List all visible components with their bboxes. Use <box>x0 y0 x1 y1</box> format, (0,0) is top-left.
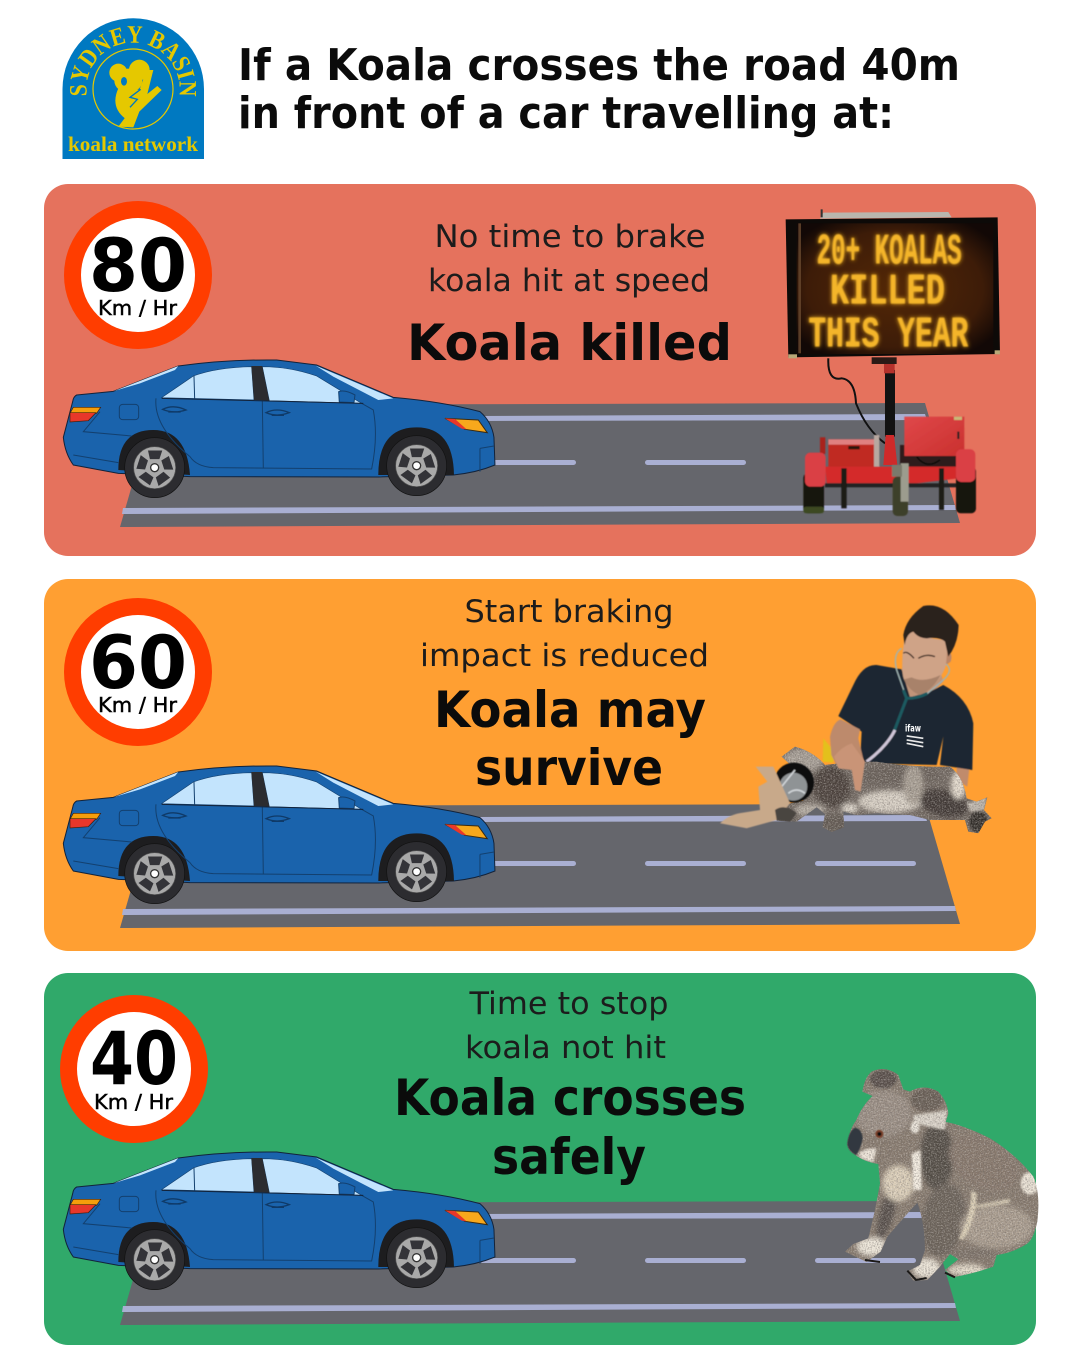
car <box>63 1152 495 1290</box>
injured koala with mask and bandage <box>776 746 992 834</box>
panel: 80 km/h <box>44 184 1036 556</box>
car <box>63 766 495 904</box>
panel: 60 km/h <box>44 579 1036 951</box>
speed sign: 80: Km / Hr <box>98 296 178 320</box>
variable message sign on trailer: KILLED <box>830 268 945 317</box>
title <box>238 40 960 139</box>
outcome: koala crosses safely: Koala crosses <box>394 1069 746 1127</box>
title: in front of a car travelling at: <box>238 88 894 139</box>
outcome: koala may survive <box>434 681 706 797</box>
text: time to stop: Time to stop <box>468 986 668 1022</box>
logo koala emblem <box>109 60 162 127</box>
speed sign: 80 <box>64 201 212 349</box>
speed sign: 60: 60 <box>89 621 187 706</box>
photo: koala sitting <box>845 1069 1038 1281</box>
car <box>63 360 495 498</box>
outcome: koala crosses safely: safely <box>492 1128 646 1186</box>
speed sign: 60: Km / Hr <box>98 693 178 717</box>
text: no time to brake: No time to brake <box>434 219 706 255</box>
title: If a Koala crosses the road 40m <box>238 40 960 91</box>
variable message sign on trailer: 20+ KOALAS <box>817 228 962 277</box>
logo: Sydney Basin koala network <box>62 18 204 159</box>
road <box>120 403 960 527</box>
photo: vet treating injured koala <box>720 605 997 837</box>
text: no time to brake: koala hit at speed <box>428 263 710 299</box>
road <box>120 804 960 928</box>
outcome: koala may survive: survive <box>475 739 663 797</box>
outcome: koala killed: Koala killed <box>407 314 732 372</box>
speed sign: 40: Km / Hr <box>94 1090 174 1114</box>
speed sign: 40: 40 <box>90 1017 178 1102</box>
panel: 40 km/h <box>44 973 1047 1345</box>
logo: Sydney Basin koala network: koala network <box>68 132 198 156</box>
speed sign: 80: 80 <box>89 224 187 309</box>
text: time to stop <box>465 986 668 1066</box>
photo: vet treating injured koala: ifaw <box>905 724 921 735</box>
text: start braking <box>420 594 709 674</box>
road <box>120 1201 960 1325</box>
text: no time to brake <box>428 219 710 299</box>
text: start braking: Start braking <box>464 594 674 630</box>
speed sign: 40 <box>60 995 208 1143</box>
outcome: koala crosses safely <box>394 1069 746 1186</box>
logo arc text: SYDNEY BASIN <box>70 26 196 96</box>
trailer <box>803 417 976 516</box>
variable message sign on trailer <box>786 209 1000 516</box>
text: start braking: impact is reduced <box>420 638 709 674</box>
outcome: koala may survive: Koala may <box>434 681 706 739</box>
text: time to stop: koala not hit <box>465 1030 666 1066</box>
speed sign: 60 <box>64 598 212 746</box>
variable message sign on trailer: THIS YEAR <box>808 312 968 361</box>
